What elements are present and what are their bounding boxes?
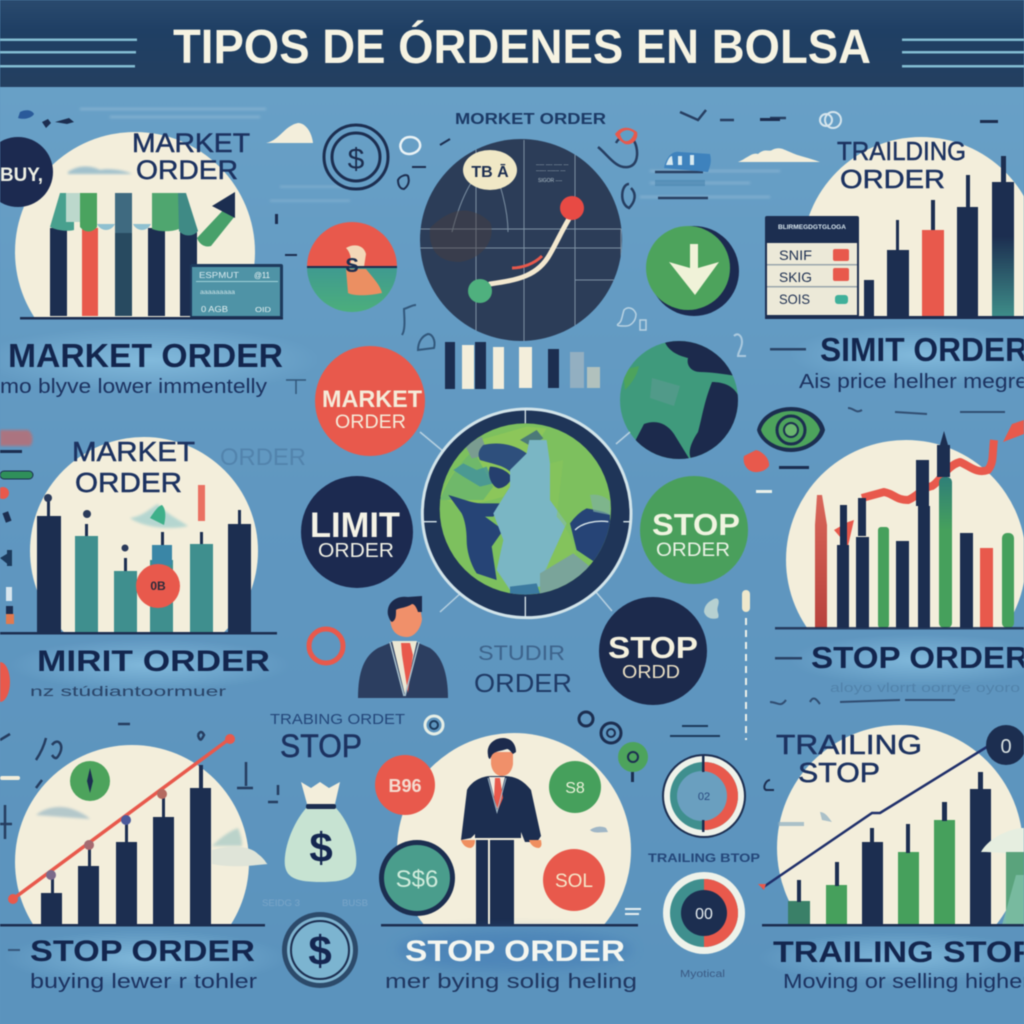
price line xyxy=(490,214,572,284)
heading: stop order right: aloyo vlorrt oorrye oyoro xyxy=(830,680,1020,695)
bar chart xyxy=(815,477,1014,628)
order table: SOIS xyxy=(779,291,810,307)
panel label: trailing stop: TRAILING xyxy=(776,729,922,760)
badge: limit order: ORDER xyxy=(318,540,394,562)
icon: money bag: $ xyxy=(309,824,333,871)
order table: SNIF xyxy=(779,247,812,263)
faint caption: Myotical xyxy=(680,969,725,980)
panel label: MARKET xyxy=(132,128,250,158)
panel label: ORDER xyxy=(75,467,182,498)
trend line xyxy=(758,725,1024,890)
left edge icons xyxy=(0,430,33,702)
heading: stop order bottom center: STOP ORDER xyxy=(405,935,625,968)
panel: trading order top right xyxy=(764,136,1024,320)
badge: limit order: LIMIT xyxy=(310,506,400,545)
icon: dollar coin xyxy=(324,125,388,189)
badge: market order red: ORDER xyxy=(335,412,406,433)
heading: stop order bottom center xyxy=(385,930,637,993)
order table xyxy=(765,216,859,317)
price card: 0 AGB xyxy=(201,305,228,314)
red trend line xyxy=(862,440,994,500)
buy badge: BUY, xyxy=(0,165,43,186)
panel label: ORDER xyxy=(840,164,945,194)
heading: stop order bottom center: mer bying solig heling xyxy=(385,971,637,993)
oval label xyxy=(463,150,517,190)
faint labels xyxy=(262,898,368,908)
icon: dollar coin bottom: $ xyxy=(308,927,332,974)
faint labels: BUSB xyxy=(342,898,368,908)
red marker xyxy=(136,564,180,608)
badge: stop order navy: STOP xyxy=(608,630,698,665)
small legend: SIGOR ---- xyxy=(538,178,562,184)
icon: money bag xyxy=(285,782,356,882)
candlestick bars xyxy=(864,156,1014,318)
heading: market order center: MORKET ORDER xyxy=(455,111,607,128)
panel label: ORDER xyxy=(136,155,238,185)
badge: sol: SOL xyxy=(555,871,593,892)
scribble icons top center xyxy=(18,110,998,394)
panel label: TRAILDING xyxy=(837,136,966,166)
connector lines around globe xyxy=(420,432,630,612)
panel label xyxy=(72,436,195,498)
header band xyxy=(0,0,1024,87)
badge: teal xyxy=(379,840,455,916)
header lines left xyxy=(0,38,137,68)
price card: aaaaaaaaa xyxy=(200,290,236,296)
title: TIPOS DE ÓRDENES EN BOLSA xyxy=(173,19,871,74)
panel: trailing stop bottom right xyxy=(761,724,1024,928)
heading: mirit order: nz stúdiantoormuer xyxy=(30,683,227,699)
heading: stop order bottom left: STOP ORDER xyxy=(30,935,255,968)
badge: sol xyxy=(543,849,605,911)
panel label: trailing stop xyxy=(776,729,922,788)
icon: green down arrow button xyxy=(646,226,739,316)
panel: stop order bottom center xyxy=(374,732,639,928)
label: training order stop xyxy=(270,711,405,764)
badge: stop order green: ORDER xyxy=(656,540,730,561)
icon: dollar coin bottom xyxy=(282,912,358,988)
icon: red ring xyxy=(309,629,343,663)
heading: stop order bottom left: buying lewer r tohler xyxy=(30,971,257,993)
badge: market order red: MARKET xyxy=(322,386,422,413)
heading: simit order xyxy=(770,325,1024,393)
small legend: ----- ---- ----- --- xyxy=(536,162,569,168)
heading: trailing stop xyxy=(760,932,1024,993)
heading: simit order: Ais price helher megre xyxy=(799,371,1024,393)
gauge top xyxy=(662,754,746,838)
cloud xyxy=(981,828,1024,854)
trend line: 0 xyxy=(1000,736,1012,758)
badge: buy xyxy=(375,755,435,815)
icon: eye xyxy=(757,407,825,452)
order table: BLIRMEGDGTGLOGA xyxy=(778,225,847,231)
panel: market order top left xyxy=(14,131,284,320)
price card: OID xyxy=(255,307,271,314)
heading: mirit order: MIRIT ORDER xyxy=(37,645,270,678)
scribbles bottom left xyxy=(0,724,278,839)
label: studir order: STUDIR xyxy=(478,642,565,665)
red marker: 0B xyxy=(150,579,166,593)
label: trailing stop small: TRAILING BTOP xyxy=(648,851,760,865)
label: studir order: ORDER xyxy=(474,668,572,698)
gauge bottom: 00 xyxy=(695,906,713,923)
candle wicks xyxy=(840,431,950,545)
panel: market order middle left xyxy=(0,436,278,636)
bar chart xyxy=(37,485,251,633)
label: studir order xyxy=(474,642,572,698)
cloud icon xyxy=(266,123,313,143)
badge: buy: B96 xyxy=(388,776,422,796)
buy badge xyxy=(0,137,53,207)
gauge top: 02 xyxy=(698,791,710,803)
order table: SKIG xyxy=(779,269,812,285)
panel label: MARKET xyxy=(72,436,195,467)
panel label: trailing stop: STOP xyxy=(798,757,880,788)
green badge xyxy=(70,761,110,801)
icon: red teal disc xyxy=(307,222,397,312)
heading: trailing stop: Moving or selling higher xyxy=(783,971,1024,993)
heading: market order xyxy=(0,326,320,398)
heading: stop order right: STOP ORDER xyxy=(811,640,1024,675)
small legend: ------ ------- --- xyxy=(536,168,566,174)
bar chart xyxy=(788,772,991,925)
heading: market order: MARKET ORDER xyxy=(8,337,283,374)
price card: ESPMUT xyxy=(199,271,239,280)
panel: stop order bottom left xyxy=(0,744,268,928)
dark globe chart: TB Ā xyxy=(471,162,509,181)
small marks near gauges xyxy=(625,909,641,914)
bar chart xyxy=(41,765,211,925)
red blob marker xyxy=(744,450,769,472)
badge: green xyxy=(549,761,601,813)
label: training order stop: TRABING ORDET xyxy=(270,711,405,728)
panel label xyxy=(837,136,966,194)
panel: stop order right xyxy=(774,420,1024,630)
businessman full xyxy=(461,738,542,925)
businessman bust xyxy=(358,596,448,698)
badge: market order red xyxy=(315,346,425,456)
badge: teal: S$6 xyxy=(396,866,438,893)
badge: stop order navy: ORDD xyxy=(622,662,680,682)
small legend xyxy=(536,162,569,184)
mini bars center xyxy=(445,342,600,389)
market stall xyxy=(50,193,198,316)
badge: green: S8 xyxy=(565,780,585,797)
badge: stop order green: STOP xyxy=(652,507,740,542)
arrow up xyxy=(197,192,235,247)
faint labels: SEIDG 3 xyxy=(262,898,300,908)
heading: mirit order xyxy=(10,639,290,699)
badge: stop order navy xyxy=(599,597,707,705)
price card xyxy=(190,264,283,318)
icon: red teal disc: S xyxy=(345,255,359,277)
heading: trailing stop: TRAILING STOP xyxy=(773,936,1024,969)
panel label xyxy=(132,128,250,185)
label: training order stop: STOP xyxy=(280,728,362,764)
heading: stop order bottom left xyxy=(5,930,285,993)
faint label: ORDER xyxy=(220,444,306,471)
small globe xyxy=(620,339,740,470)
heading: stop order right xyxy=(775,634,1024,695)
scribbles right xyxy=(770,408,1005,704)
gauge bottom xyxy=(663,872,745,954)
badge: limit order xyxy=(301,476,413,588)
ground line xyxy=(20,317,283,320)
icon: dollar coin: $ xyxy=(348,143,365,176)
icon: green pin xyxy=(618,742,648,782)
header lines right xyxy=(902,38,1024,68)
main globe xyxy=(422,408,632,618)
price card: @11 xyxy=(254,271,271,280)
dark globe chart xyxy=(420,139,625,350)
heading: market order: mo blyve lower immentelly xyxy=(0,376,267,398)
small icons bottom center xyxy=(579,712,621,743)
dashed vertical marker xyxy=(704,590,750,740)
red trend line xyxy=(8,734,235,904)
small ring icon xyxy=(425,716,443,734)
badge: stop order green xyxy=(640,476,748,584)
